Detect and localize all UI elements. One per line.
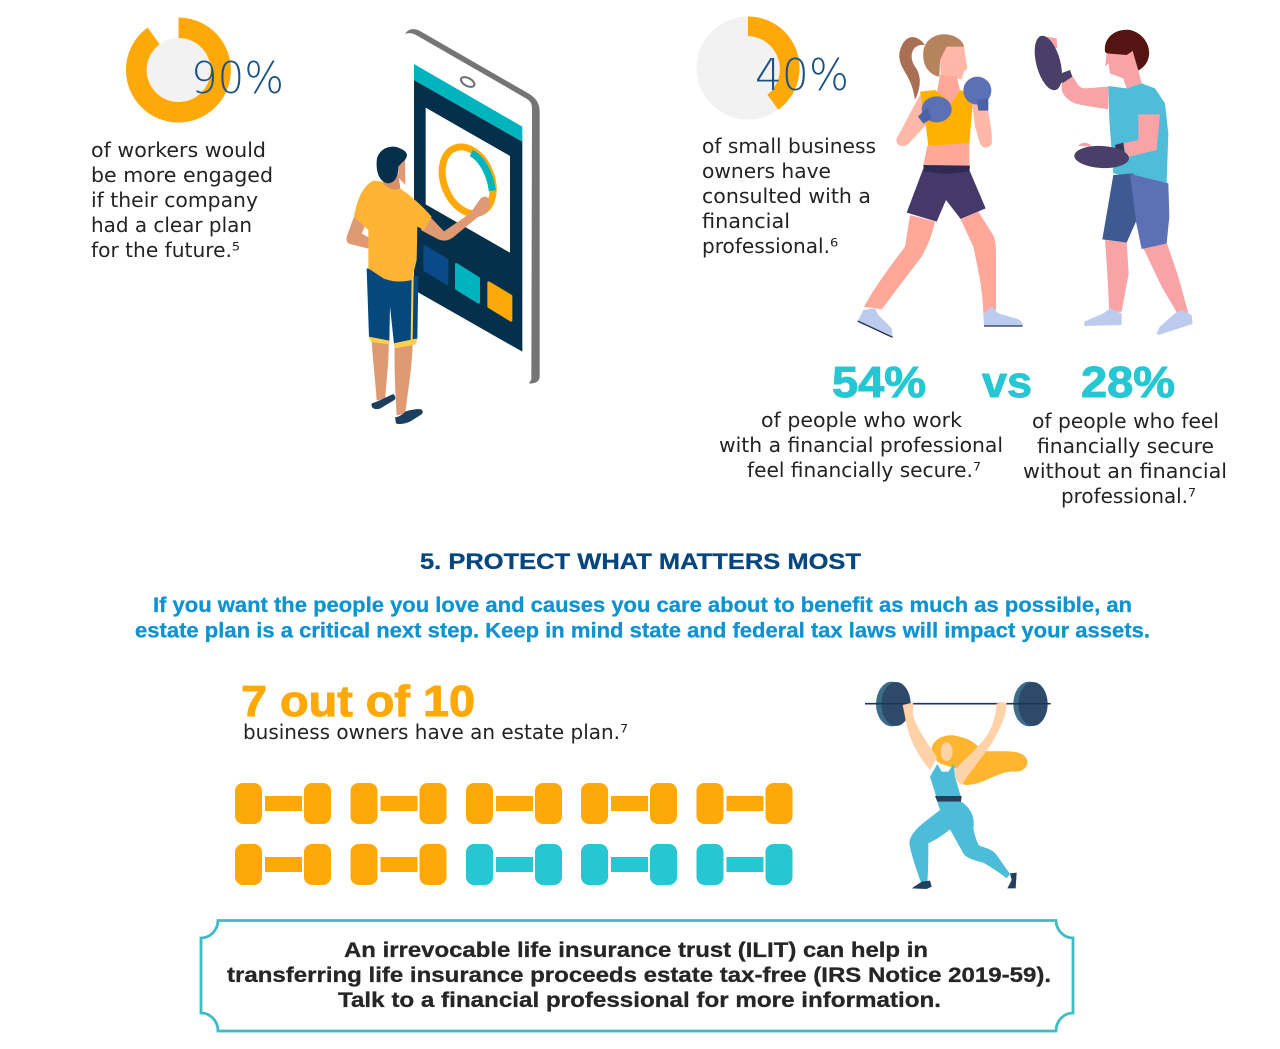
text: small business owners — [702, 134, 876, 258]
text: with a financial professional: of people who work — [761, 408, 962, 432]
intro paragraph: If you want the people you love and causes you care about to benefit as much as possible, an — [153, 594, 1132, 617]
dumbbell 9 — [581, 844, 677, 885]
text: without a financial professional — [1023, 409, 1227, 508]
dumbbell 3 — [466, 783, 562, 824]
text: workers engaged: for the future.⁵ — [91, 238, 240, 262]
stat: 90%: 90% — [191, 53, 284, 104]
lifter — [903, 702, 1027, 889]
illustration: woman weightlifter — [865, 682, 1051, 889]
text: without a financial professional: professional.⁷ — [1061, 484, 1196, 508]
tablet screen — [414, 80, 522, 352]
screen squares — [425, 246, 511, 320]
text: workers engaged: of workers would — [91, 138, 266, 162]
screen header — [414, 64, 522, 142]
intro paragraph: estate plan is a critical next step. Keep in mind state and federal tax laws will impact your assets. — [135, 620, 1150, 642]
callout text: An irrevocable life insurance trust (ILIT) can help in — [344, 938, 928, 962]
dumbbell 7 — [350, 844, 446, 885]
screen chart panel — [426, 108, 510, 253]
tablet earpiece — [459, 75, 476, 89]
text: workers engaged — [91, 138, 273, 262]
text: without a financial professional: without an financial — [1023, 459, 1227, 483]
stat: 28%: 28% — [1081, 358, 1175, 407]
donut chart: 90 percent — [126, 18, 231, 122]
text: vs: vs — [982, 358, 1032, 407]
stat: 40%: 40% — [755, 50, 849, 101]
text: small business owners: owners have — [702, 159, 831, 183]
text: workers engaged: had a clear plan — [91, 213, 252, 237]
dumbbell 4 — [581, 783, 677, 824]
pictogram: dumbbells 7 of 10 — [235, 783, 792, 885]
text: without a financial professional: of people who feel — [1032, 409, 1219, 433]
dumbbell 10 — [696, 844, 792, 885]
dumbbell 1 — [235, 783, 331, 824]
illustration: boxers — [858, 30, 1193, 337]
text: with a financial professional: with a financial professional — [719, 433, 1003, 457]
text: small business owners: professional.⁶ — [702, 234, 838, 258]
text: workers engaged: if their company — [91, 188, 258, 212]
text: small business owners: financial — [702, 209, 790, 233]
woman boxer — [858, 34, 1023, 337]
donut chart: 40 percent — [696, 16, 800, 120]
tablet frame — [405, 29, 540, 383]
callout text: transferring life insurance proceeds estate tax-free (IRS Notice 2019-59). — [227, 963, 1051, 987]
callout frame — [201, 920, 1073, 1031]
callout text: Talk to a financial professional for more information. — [338, 988, 941, 1012]
barbell — [865, 682, 1051, 726]
dumbbell 8 — [466, 844, 562, 885]
callout text — [227, 938, 1051, 1012]
illustration: man using a tablet — [346, 29, 540, 424]
man — [346, 147, 490, 424]
stat: 54%: 54% — [832, 358, 926, 407]
text: with a financial professional — [719, 408, 1003, 482]
heading: section 5: 5. PROTECT WHAT MATTERS MOST — [420, 549, 861, 574]
text: business owners: business owners have an estate plan.⁷ — [243, 720, 628, 744]
man with pads — [1029, 30, 1193, 335]
text: small business owners: of small business — [702, 134, 876, 158]
screen ring chart — [433, 139, 503, 221]
intro paragraph — [135, 594, 1150, 642]
dumbbell 6 — [235, 844, 331, 885]
text: with a financial professional: feel financially secure.⁷ — [747, 458, 981, 482]
dumbbell 2 — [350, 783, 446, 824]
dumbbell 5 — [696, 783, 792, 824]
stat: 7 out of 10: 7 out of 10 — [241, 677, 475, 726]
text: small business owners: consulted with a — [702, 184, 871, 208]
callout: ILIT — [201, 920, 1073, 1031]
text: without a financial professional: financially secure — [1037, 434, 1214, 458]
text: workers engaged: be more engaged — [91, 163, 273, 187]
